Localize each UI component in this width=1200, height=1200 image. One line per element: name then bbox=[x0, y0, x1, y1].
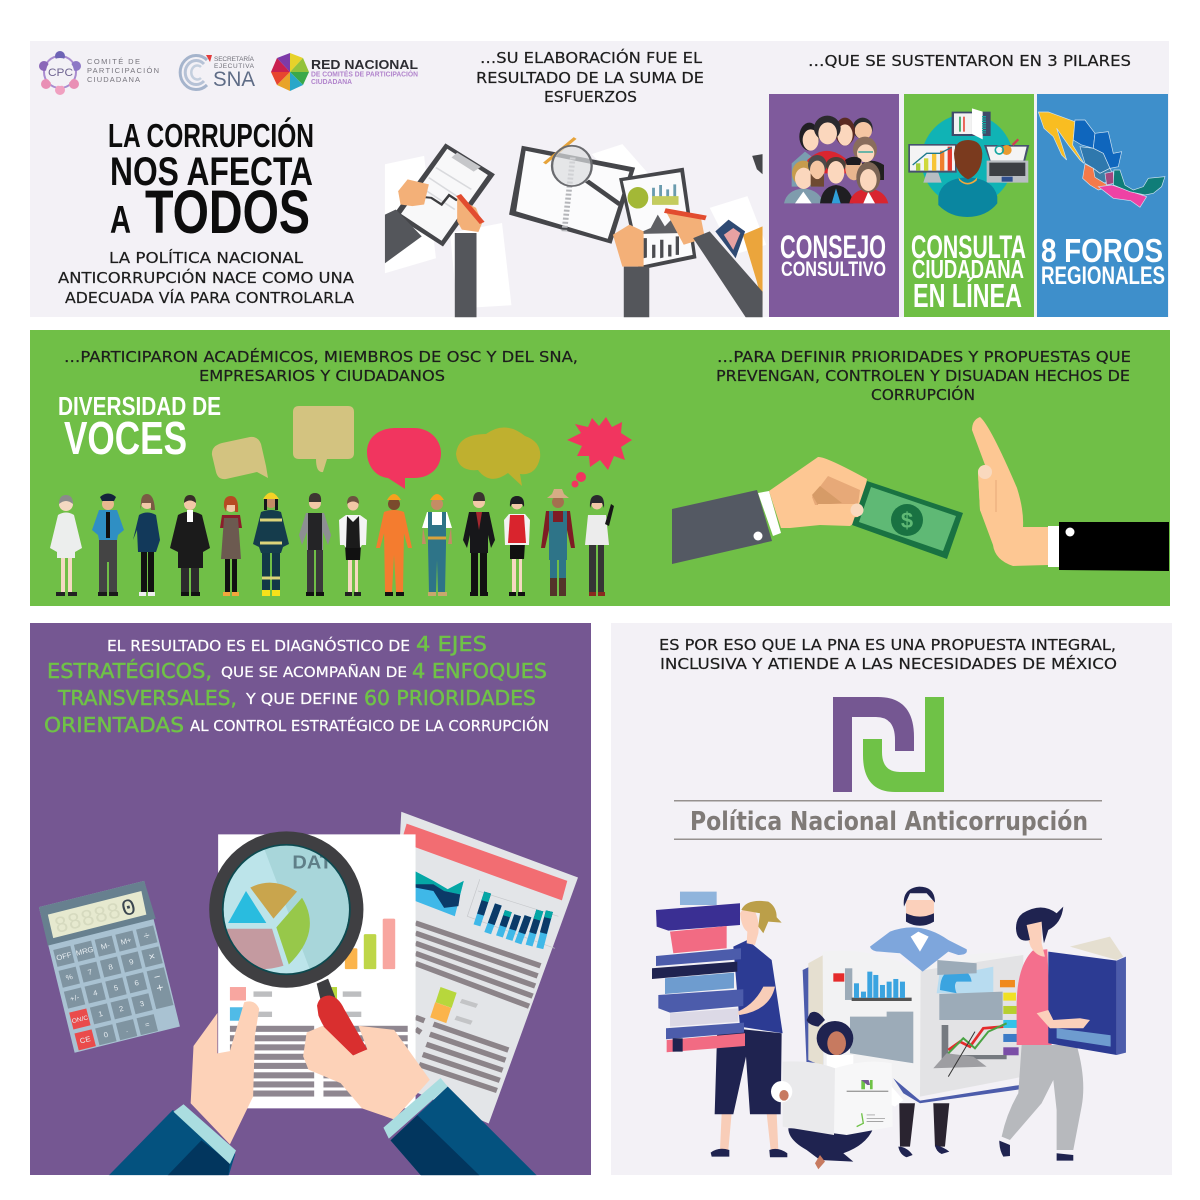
logo: CPC: CIUDADANA bbox=[87, 75, 140, 84]
label: consulta ciudadana: CIUDADANA bbox=[912, 254, 1024, 284]
panel: diversity of voices bbox=[30, 330, 1170, 606]
left hand and sleeve bbox=[107, 1001, 259, 1177]
text block: diagnosis: QUE SE ACOMPAÑAN DE bbox=[221, 664, 407, 681]
right hand and sleeve bbox=[303, 1026, 539, 1177]
text block: elaboration bbox=[476, 48, 704, 106]
text block: purpose: …PARA DEFINIR PRIORIDADES Y PROPUESTAS QUE bbox=[717, 348, 1131, 366]
icon: calculator: . bbox=[124, 1025, 129, 1034]
heading: diversidad de voces bbox=[58, 391, 221, 464]
illustration: people with books bbox=[652, 887, 1126, 1169]
text block: participants: …PARTICIPARON ACADÉMICOS, MIEMBROS DE OSC Y DEL SNA, bbox=[64, 347, 578, 366]
heading: main title: A bbox=[110, 199, 131, 242]
worker: hostess bbox=[339, 496, 367, 596]
bearded man bbox=[870, 887, 967, 1157]
icon: calculator: ÷ bbox=[142, 930, 151, 943]
logo: CPC: PARTICIPACIÓN bbox=[87, 66, 159, 75]
text block: policy origin: LA POLÍTICA NACIONAL bbox=[109, 248, 304, 267]
panel: foros regionales bbox=[1037, 94, 1168, 317]
label: consejo consultivo: CONSEJO bbox=[780, 229, 886, 265]
icon: calculator: 4 bbox=[92, 988, 98, 998]
worker: judge bbox=[170, 495, 210, 596]
label: consulta ciudadana: CONSULTA bbox=[911, 229, 1026, 265]
illustration: hands with documents bbox=[385, 138, 766, 320]
text block: purpose bbox=[716, 348, 1131, 404]
text block: participants bbox=[64, 347, 578, 385]
worker: firefighter bbox=[253, 492, 289, 596]
text block: integral proposal bbox=[659, 636, 1117, 673]
worker: doctor bbox=[50, 495, 82, 596]
woman holding blue book bbox=[999, 907, 1126, 1161]
open book with charts bbox=[803, 951, 1023, 1103]
panel: strategic diagnosis bbox=[30, 623, 591, 1177]
icon: calculator: × bbox=[148, 951, 157, 963]
text block: diagnosis: TRANSVERSALES, bbox=[57, 686, 237, 710]
icon: calculator: + bbox=[155, 980, 165, 995]
text block: diagnosis: ORIENTADAS bbox=[44, 713, 184, 737]
worker: waiter bbox=[299, 493, 331, 596]
worker: reporter bbox=[133, 494, 160, 596]
icons: speech bubbles bbox=[212, 406, 632, 489]
logo: Red Nacional: CIUDADANA bbox=[311, 79, 352, 86]
icon: banknote bbox=[852, 481, 963, 559]
panel: consejo consultivo bbox=[769, 94, 899, 317]
text block: participants: EMPRESARIOS Y CIUDADANOS bbox=[199, 367, 445, 385]
icon: calculator: CE bbox=[79, 1034, 91, 1045]
logo: SNA: SNA bbox=[213, 68, 255, 91]
icon: magnifying glass with pie chart: DAT bbox=[292, 852, 332, 873]
text block: pillars heading: …QUE SE SUSTENTARON EN 3 PILARES bbox=[808, 52, 1131, 70]
label: foros regionales bbox=[1041, 232, 1165, 290]
worker: cashier bbox=[504, 496, 530, 596]
text block: integral proposal: INCLUSIVA Y ATIENDE A LAS NECESIDADES DE MÉXICO bbox=[660, 654, 1117, 673]
icon: calculator: 5 bbox=[113, 983, 119, 993]
text block: policy origin: ADECUADA VÍA PARA CONTROLARLA bbox=[65, 288, 355, 307]
label: consulta ciudadana: EN LÍNEA bbox=[913, 277, 1022, 314]
text block: elaboration: …SU ELABORACIÓN FUE EL bbox=[480, 48, 703, 67]
icon: magnifying glass with pie chart bbox=[216, 834, 367, 1055]
heading: main title: LA CORRUPCIÓN bbox=[108, 117, 314, 154]
logo: SNA: SECRETARÍA bbox=[214, 54, 255, 63]
icon: calculator: MRG bbox=[75, 945, 95, 958]
icon: calculator: 0 bbox=[118, 895, 140, 924]
text block: diagnosis: EL RESULTADO ES EL DIAGNÓSTICO DE bbox=[107, 636, 410, 655]
logo: SNA bbox=[180, 54, 255, 91]
panel: consulta ciudadana bbox=[904, 94, 1034, 317]
text block: diagnosis: 4 ENFOQUES bbox=[412, 659, 547, 683]
icon: calculator: ON/C bbox=[71, 1015, 89, 1025]
front report sheet bbox=[218, 834, 416, 1108]
heading: diversidad de voces: DIVERSIDAD DE bbox=[58, 391, 221, 421]
icon: calculator: − bbox=[153, 971, 162, 984]
text block: diagnosis: ESTRATÉGICOS, bbox=[47, 659, 212, 683]
text block: purpose: PREVENGAN, CONTROLEN Y DISUADAN HECHOS DE bbox=[716, 367, 1130, 385]
text block: integral proposal: ES POR ESO QUE LA PNA ES UNA PROPUESTA INTEGRAL, bbox=[659, 636, 1116, 654]
icon: calculator: M+ bbox=[120, 935, 133, 947]
woman reading a document bbox=[771, 1012, 903, 1169]
worker: police bbox=[92, 494, 124, 596]
worker: camera operator bbox=[585, 495, 614, 596]
icon: map of Mexico bbox=[1038, 112, 1165, 207]
icon: calculator: 6 bbox=[133, 978, 140, 988]
panel: integral proposal bbox=[611, 623, 1172, 1175]
icon: calculator: 0 bbox=[103, 1030, 109, 1040]
text block: policy origin bbox=[58, 248, 355, 307]
icon: calculator: 1 bbox=[97, 1009, 104, 1019]
logo: CPC bbox=[39, 51, 159, 95]
text block: elaboration: ESFUERZOS bbox=[544, 88, 637, 106]
worker: farmer bbox=[541, 489, 575, 596]
label: consejo consultivo bbox=[780, 229, 886, 281]
logo: Red Nacional: DE COMITÉS DE PARTICIPACIÓN bbox=[311, 70, 418, 78]
icon: calculator: M- bbox=[100, 941, 111, 951]
illustration: row of workers bbox=[50, 489, 614, 596]
logo: CPC: COMITÉ DE bbox=[87, 57, 140, 66]
text block: diagnosis: AL CONTROL ESTRATÉGICO DE LA CORRUPCIÓN bbox=[190, 716, 549, 735]
panel: top introduction bbox=[30, 41, 1169, 320]
icon: crowd of people bbox=[784, 116, 888, 203]
illustration: data analysis on desk bbox=[39, 812, 578, 1177]
text block: diagnosis: 60 PRIORIDADES bbox=[364, 686, 536, 710]
text block: diagnosis bbox=[44, 632, 549, 737]
logo: SNA: EJECUTIVA bbox=[214, 63, 255, 70]
icon: calculator bbox=[39, 881, 180, 1053]
worker: waitress bbox=[220, 496, 242, 596]
heading: diversidad de voces: VOCES bbox=[64, 412, 187, 464]
logo: PNA symbol bbox=[833, 697, 944, 792]
illustration: hand offering a bribe bbox=[672, 457, 963, 564]
icon: calculator: % bbox=[65, 972, 74, 982]
text block: purpose: CORRUPCIÓN bbox=[871, 385, 975, 404]
worker: builder bbox=[422, 494, 452, 596]
logo: CPC: CPC bbox=[48, 67, 73, 79]
label: consulta ciudadana bbox=[911, 229, 1026, 314]
text block: elaboration: RESULTADO DE LA SUMA DE bbox=[476, 69, 704, 87]
heading: main title: NOS AFECTA bbox=[110, 150, 313, 194]
icon: calculator: 9 bbox=[128, 957, 135, 967]
icon: calculator: 7 bbox=[87, 967, 93, 977]
logo: Red Nacional bbox=[271, 53, 418, 91]
icon: calculator: OFF bbox=[55, 950, 73, 962]
text block: diagnosis: Y QUE DEFINE bbox=[245, 690, 358, 708]
text block: diagnosis: 4 EJES bbox=[416, 632, 487, 656]
icon: calculator: 8 bbox=[107, 962, 114, 972]
icon: calculator: = bbox=[144, 1020, 151, 1029]
icon: person with screens bbox=[908, 108, 1029, 217]
icon: calculator: +/- bbox=[69, 993, 81, 1003]
label: consejo consultivo: CONSULTIVO bbox=[781, 258, 886, 281]
icon: calculator: 88888 bbox=[52, 899, 124, 941]
back report sheet bbox=[387, 812, 578, 1124]
text block: policy origin: ANTICORRUPCIÓN NACE COMO UNA bbox=[58, 268, 355, 287]
icon: calculator: 3 bbox=[139, 999, 145, 1008]
worker: technician in orange bbox=[376, 494, 412, 596]
heading: main title: TODOS bbox=[145, 178, 310, 246]
icon: calculator: 2 bbox=[118, 1004, 124, 1014]
label: foros regionales: 8 FOROS bbox=[1041, 232, 1163, 269]
heading: main title bbox=[108, 117, 314, 246]
heading: Política Nacional Anticorrupción: Política Nacional Anticorrupción bbox=[690, 807, 1088, 837]
illustration: hand refusing bbox=[972, 417, 1169, 571]
person carrying a stack of books bbox=[652, 892, 787, 1157]
logo: Red Nacional: RED NACIONAL bbox=[311, 57, 418, 72]
worker: executive bbox=[463, 492, 495, 596]
icon: banknote: $ bbox=[901, 508, 913, 533]
